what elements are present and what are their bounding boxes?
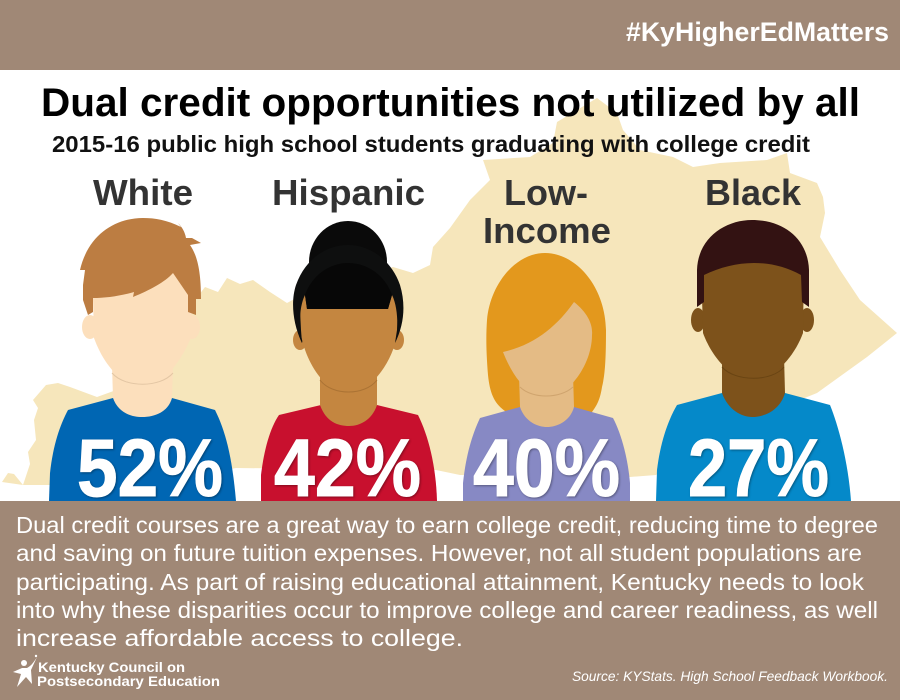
- face: [503, 302, 592, 397]
- body text: and saving on future tuition expenses. However, not all student populations are: [16, 540, 862, 566]
- hair: [486, 253, 606, 413]
- face: [92, 260, 192, 385]
- chin line: [722, 367, 784, 378]
- top banner: [0, 0, 900, 70]
- percent: 40%: 40%: [473, 423, 620, 514]
- label: Black: Black: [705, 172, 802, 213]
- figure: Low-Income: [463, 172, 630, 501]
- ears: [293, 330, 307, 350]
- title: Dual credit opportunities not utilized by all: [41, 81, 860, 125]
- label: Hispanic: Hispanic: [272, 172, 425, 213]
- shirt: [49, 398, 236, 501]
- body text: participating. As part of raising educational attainment, Kentucky needs to look: [16, 569, 864, 595]
- shirt: [656, 393, 851, 501]
- chin line: [112, 373, 173, 384]
- hair: [80, 218, 201, 315]
- figure: White: [49, 172, 236, 501]
- logo text: Postsecondary Education: [37, 673, 220, 689]
- fringe: [305, 263, 392, 309]
- label: Low-Income: Low-: [504, 172, 588, 213]
- shirt: [463, 407, 630, 501]
- percent: 52%: 52%: [77, 423, 223, 514]
- face: [701, 260, 804, 380]
- ears: [691, 308, 705, 332]
- map of Kentucky: [2, 98, 897, 485]
- neck: [112, 365, 173, 417]
- hair: [697, 220, 809, 307]
- chin line: [520, 387, 573, 396]
- hair: [293, 245, 403, 343]
- logo: [13, 655, 220, 689]
- percent: 42%: 42%: [274, 423, 421, 514]
- percent: 27%: 27%: [688, 423, 829, 514]
- neck: [722, 355, 785, 417]
- body text: increase affordable access to college.: [16, 625, 463, 651]
- body text: [16, 512, 878, 651]
- bottom panel: [0, 501, 900, 700]
- logo text: Kentucky Council on: [38, 659, 185, 675]
- shirt: [261, 405, 437, 501]
- hair tips: [295, 310, 402, 343]
- source: Source: KYStats. High School Feedback Workbook.: [572, 668, 888, 684]
- label: Low-Income: Income: [483, 210, 611, 251]
- neck: [519, 375, 574, 427]
- figure: Hispanic: [261, 172, 437, 501]
- hair bun: [309, 221, 387, 303]
- neck: [320, 370, 377, 426]
- label: White: White: [93, 172, 193, 213]
- body text: into why these disparities occur to improve college and career readiness, as well: [16, 597, 878, 623]
- subtitle: 2015-16 public high school students graduating with college credit: [52, 131, 810, 157]
- face: [300, 295, 397, 393]
- body text: Dual credit courses are a great way to earn college credit, reducing time to degree: [16, 512, 878, 538]
- figure: Black: [656, 172, 851, 501]
- logo icon: figure: [13, 657, 37, 687]
- ears: [82, 315, 98, 339]
- hashtag: #KyHigherEdMatters: [626, 17, 889, 47]
- chin line: [320, 380, 377, 392]
